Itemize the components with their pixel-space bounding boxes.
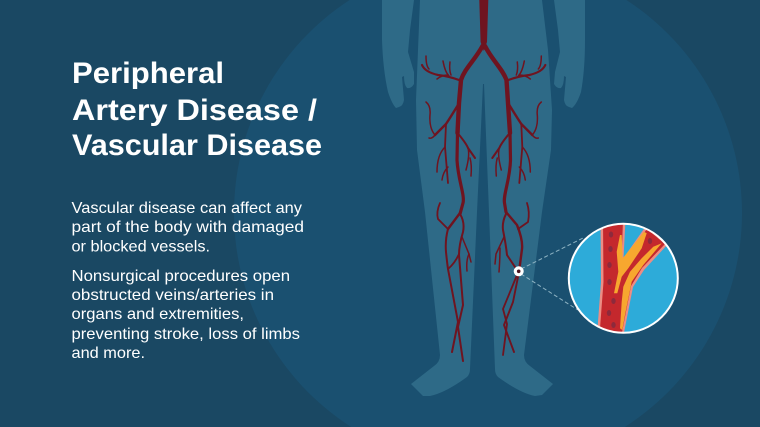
arteries [422, 0, 545, 361]
paragraph: nonsurgical procedures: preventing stroke, loss of limbs [72, 326, 300, 343]
left lower leg arteries [437, 203, 471, 361]
title: Peripheral [72, 57, 224, 90]
left upper branches [422, 56, 475, 183]
paragraph: vascular disease [72, 200, 304, 256]
paragraph: nonsurgical procedures: organs and extremities, [72, 306, 244, 323]
body silhouette [382, 0, 585, 396]
paragraph: nonsurgical procedures: obstructed veins/arteries in [72, 287, 274, 304]
marker [514, 266, 524, 276]
title [72, 57, 322, 162]
right arm [554, 0, 585, 108]
title: Artery Disease / [72, 94, 318, 127]
magnified artery callout [569, 220, 678, 335]
blood cells [607, 232, 652, 328]
torso and legs [411, 0, 553, 396]
title: Vascular Disease [72, 129, 322, 162]
paragraph: nonsurgical procedures: Nonsurgical procedures open [72, 268, 290, 285]
left arm [382, 0, 414, 108]
lens ring [569, 224, 678, 333]
paragraph: vascular disease: or blocked vessels. [72, 238, 210, 256]
paragraph: vascular disease: Vascular disease can affect any [72, 200, 302, 217]
lens background [569, 224, 678, 333]
vessel wall [597, 220, 668, 335]
plaque [614, 232, 647, 293]
paragraph: nonsurgical procedures: and more. [72, 345, 145, 362]
callout dashed lines [521, 238, 583, 310]
right upper branches [492, 56, 545, 183]
artery cross-section [597, 220, 668, 335]
background circle [234, 0, 742, 427]
paragraph: vascular disease: part of the body with damaged [72, 219, 304, 236]
paragraph: nonsurgical procedures [72, 268, 300, 362]
iliac and main leg arteries [458, 46, 482, 133]
aorta [479, 0, 488, 51]
right lower leg arteries [495, 203, 529, 355]
vessel interior [600, 220, 665, 335]
